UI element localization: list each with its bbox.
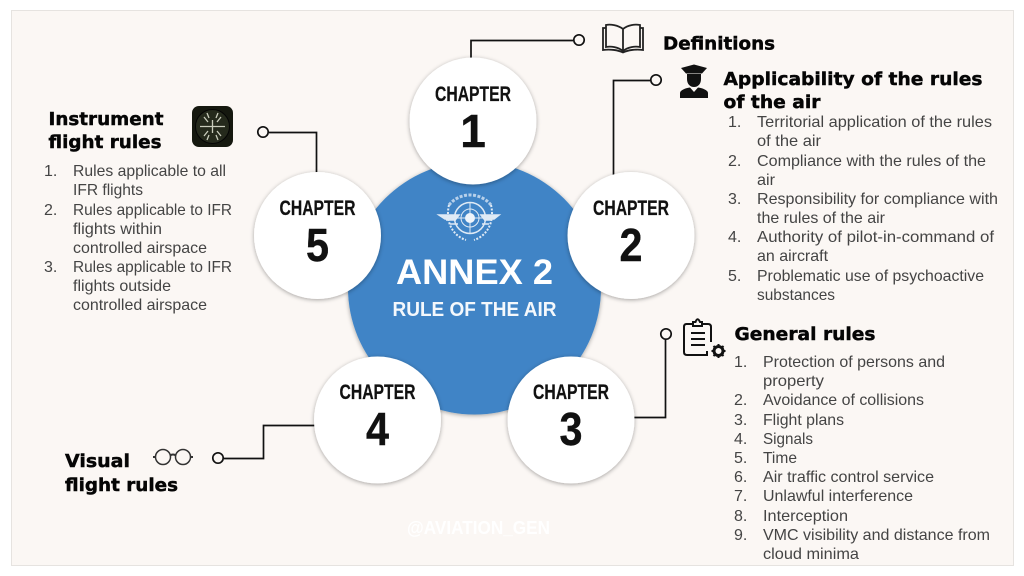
icon: attitude instrument bbox=[192, 106, 233, 147]
list: general rules items bbox=[734, 354, 990, 563]
title: ANNEX 2: ANNEX 2 bbox=[396, 253, 553, 292]
list: general rules items: VMC visibility and distance from bbox=[763, 527, 990, 544]
chapter 5 circle: CHAPTER bbox=[280, 197, 356, 220]
heading: General rules: General rules bbox=[734, 324, 876, 345]
list: applicability items: 5. bbox=[728, 268, 741, 285]
list: applicability items: an aircraft bbox=[757, 248, 829, 265]
chapter 4 circle: CHAPTER bbox=[340, 381, 416, 404]
list: general rules items: Interception bbox=[763, 508, 848, 525]
icon: pilot bbox=[680, 64, 708, 98]
list: applicability items: the rules of the air bbox=[757, 210, 886, 227]
list: general rules items: Signals bbox=[763, 431, 813, 448]
icon: glasses bbox=[153, 450, 193, 464]
chapter 4 circle bbox=[314, 356, 441, 484]
list: general rules items: cloud minima bbox=[763, 546, 859, 563]
chapter 2 circle bbox=[568, 172, 694, 299]
list: instrument flight rules items: Rules applicable to IFR bbox=[73, 259, 232, 276]
heading: Definitions: Definitions bbox=[663, 34, 775, 54]
chapter 2 circle: CHAPTER bbox=[593, 197, 669, 220]
list: instrument flight rules items: controlled airspace bbox=[73, 240, 207, 257]
list: general rules items: 2. bbox=[734, 392, 747, 409]
heading: Instrument flight rules: flight rules bbox=[48, 132, 162, 153]
heading: Applicability of the rules of the air: of the air bbox=[724, 92, 821, 113]
list: instrument flight rules items: Rules applicable to IFR bbox=[73, 202, 232, 219]
chapter 1 circle: CHAPTER bbox=[435, 83, 511, 106]
connector: chapter 4 to visual flight rules bbox=[213, 426, 318, 463]
heading: Instrument flight rules: Instrument bbox=[48, 109, 164, 130]
list: general rules items: property bbox=[763, 373, 824, 390]
list: general rules items: Avoidance of collisions bbox=[763, 392, 924, 409]
list: applicability items: 4. bbox=[728, 229, 741, 246]
heading: Visual flight rules: flight rules bbox=[65, 475, 178, 496]
list: applicability items: 2. bbox=[728, 153, 741, 170]
heading: Visual flight rules bbox=[65, 451, 178, 496]
chapter 5 circle bbox=[254, 172, 381, 299]
icon: open book bbox=[603, 25, 643, 52]
list: general rules items: 8. bbox=[734, 508, 747, 525]
list: instrument flight rules items: Rules applicable to all bbox=[73, 163, 226, 180]
list: applicability items: 1. bbox=[728, 114, 741, 131]
chapter 3 circle: CHAPTER bbox=[533, 381, 609, 404]
list: applicability items: Responsibility for compliance with bbox=[757, 191, 998, 208]
list: general rules items: 6. bbox=[734, 469, 747, 486]
list: instrument flight rules items: 3. bbox=[44, 259, 57, 276]
list: applicability items: Territorial application of the rules bbox=[757, 114, 992, 131]
list: general rules items: Unlawful interference bbox=[763, 488, 913, 505]
heading: Applicability of the rules of the air: Applicability of the rules bbox=[724, 69, 982, 90]
list: instrument flight rules items: flights within bbox=[73, 221, 162, 238]
list: applicability items: air bbox=[757, 172, 776, 189]
watermark: @AVIATION_GEN bbox=[407, 518, 550, 538]
list: applicability items: substances bbox=[757, 287, 835, 304]
icon: clipboard with gear bbox=[684, 319, 726, 358]
central circle: Annex 2 bbox=[348, 162, 601, 414]
list: general rules items: 4. bbox=[734, 431, 747, 448]
list: general rules items: 1. bbox=[734, 354, 747, 371]
chapter 2 circle: 2 bbox=[620, 219, 642, 271]
list: applicability items: 3. bbox=[728, 191, 741, 208]
list: general rules items: Time bbox=[763, 450, 797, 467]
chapter 4 circle: 4 bbox=[366, 403, 389, 455]
list: instrument flight rules items: 2. bbox=[44, 202, 57, 219]
list: general rules items: 7. bbox=[734, 488, 747, 505]
list: general rules items: Flight plans bbox=[763, 412, 844, 429]
heading: Visual flight rules: Visual bbox=[65, 451, 130, 472]
connector: chapter 1 to definitions bbox=[471, 35, 584, 60]
icon: ICAO emblem bbox=[439, 195, 499, 240]
connector: chapter 3 to general rules bbox=[632, 329, 671, 418]
list: general rules items: 5. bbox=[734, 450, 747, 467]
list: applicability items: Compliance with the rules of the bbox=[757, 153, 986, 170]
chapter 5 circle: 5 bbox=[306, 219, 329, 271]
list: instrument flight rules items: flights outside bbox=[73, 278, 171, 295]
list: general rules items: Air traffic control service bbox=[763, 469, 934, 486]
chapter 1 circle: 1 bbox=[460, 105, 486, 157]
list: general rules items: Protection of persons and bbox=[763, 354, 945, 371]
connector: chapter 2 to applicability bbox=[614, 75, 661, 178]
connector: chapter 5 to instrument flight rules bbox=[258, 127, 316, 178]
list: applicability items: of the air bbox=[757, 133, 822, 150]
list: instrument flight rules items: IFR flights bbox=[73, 182, 143, 199]
subtitle: Rule of the air: RULE OF THE AIR bbox=[392, 299, 557, 321]
chapter 3 circle bbox=[508, 356, 634, 484]
list: applicability items: Problematic use of psychoactive bbox=[757, 268, 984, 285]
heading: Instrument flight rules bbox=[48, 109, 164, 153]
list: instrument flight rules items: 1. bbox=[44, 163, 57, 180]
chapter 3 circle: 3 bbox=[560, 403, 582, 455]
heading: Applicability of the rules of the air bbox=[724, 69, 982, 113]
list: instrument flight rules items: controlled airspace bbox=[73, 297, 207, 314]
list: general rules items: 3. bbox=[734, 412, 747, 429]
list: applicability items: Authority of pilot-in-command of bbox=[757, 229, 995, 246]
list: applicability items bbox=[728, 114, 998, 304]
chapter 1 circle bbox=[410, 58, 536, 184]
list: instrument flight rules items bbox=[44, 163, 232, 314]
list: general rules items: 9. bbox=[734, 527, 747, 544]
